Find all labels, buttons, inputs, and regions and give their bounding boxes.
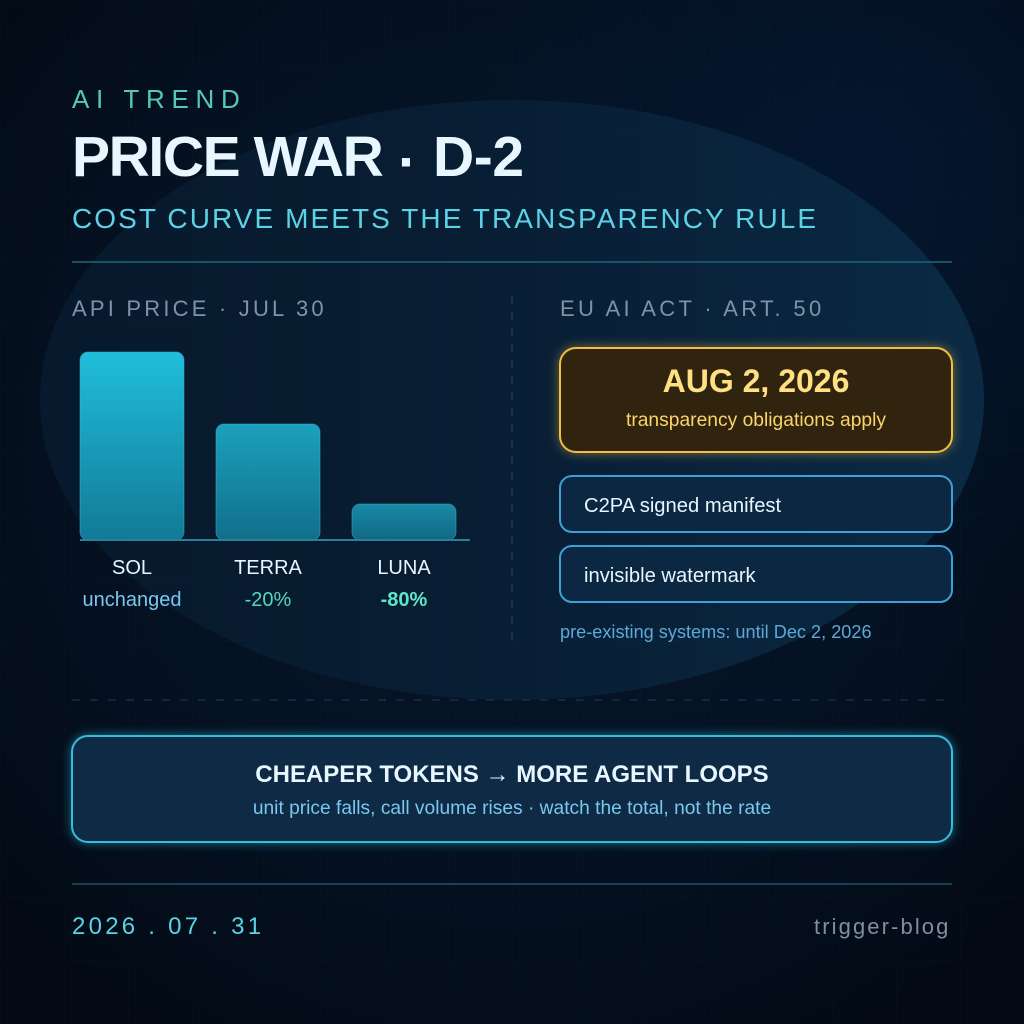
- callout: deadline: transparency obligations apply: [626, 410, 886, 431]
- callout: deadline: AUG 2, 2026: [663, 363, 849, 399]
- footer brand: trigger-blog: [814, 914, 950, 939]
- footer date: 2026 . 07 . 31: [72, 913, 264, 940]
- callout: takeaway: unit price falls, call volume rises · watch the total, not the rate: [253, 798, 771, 819]
- footnote: pre-existing systems: until Dec 2, 2026: [560, 622, 872, 642]
- value: -80%: -80%: [381, 589, 428, 611]
- header block: [72, 84, 818, 234]
- value: -20%: -20%: [245, 589, 292, 611]
- item: C2PA: [560, 476, 952, 532]
- item: watermark: invisible watermark: [584, 565, 757, 587]
- callout: deadline: [560, 348, 952, 452]
- title: PRICE WAR: [72, 125, 383, 189]
- label: SOL: SOL: [112, 557, 152, 579]
- label: TERRA: TERRA: [234, 557, 303, 579]
- subtitle: COST CURVE MEETS THE TRANSPARENCY RULE: [72, 203, 818, 234]
- panel heading: EU AI ACT · ART. 50: [560, 296, 825, 321]
- callout: takeaway: [72, 736, 952, 842]
- item: watermark: [560, 546, 952, 602]
- value: unchanged: unchanged: [83, 589, 181, 611]
- label: LUNA: LUNA: [377, 557, 431, 579]
- eyebrow: AI TREND: AI TREND: [72, 84, 246, 114]
- callout: takeaway: CHEAPER TOKENS → MORE AGENT LOOPS: [255, 761, 769, 788]
- bar: SOL: [80, 352, 184, 540]
- bar: TERRA: [216, 424, 320, 540]
- title: ·: [398, 130, 417, 194]
- panel: EU AI Act: [560, 296, 952, 642]
- panel: API price bar chart: [72, 296, 470, 611]
- item: C2PA: C2PA signed manifest: [584, 495, 782, 517]
- chart heading: API PRICE · JUL 30: [72, 296, 327, 321]
- title: D-2: [433, 125, 524, 189]
- bar: LUNA: [352, 504, 456, 540]
